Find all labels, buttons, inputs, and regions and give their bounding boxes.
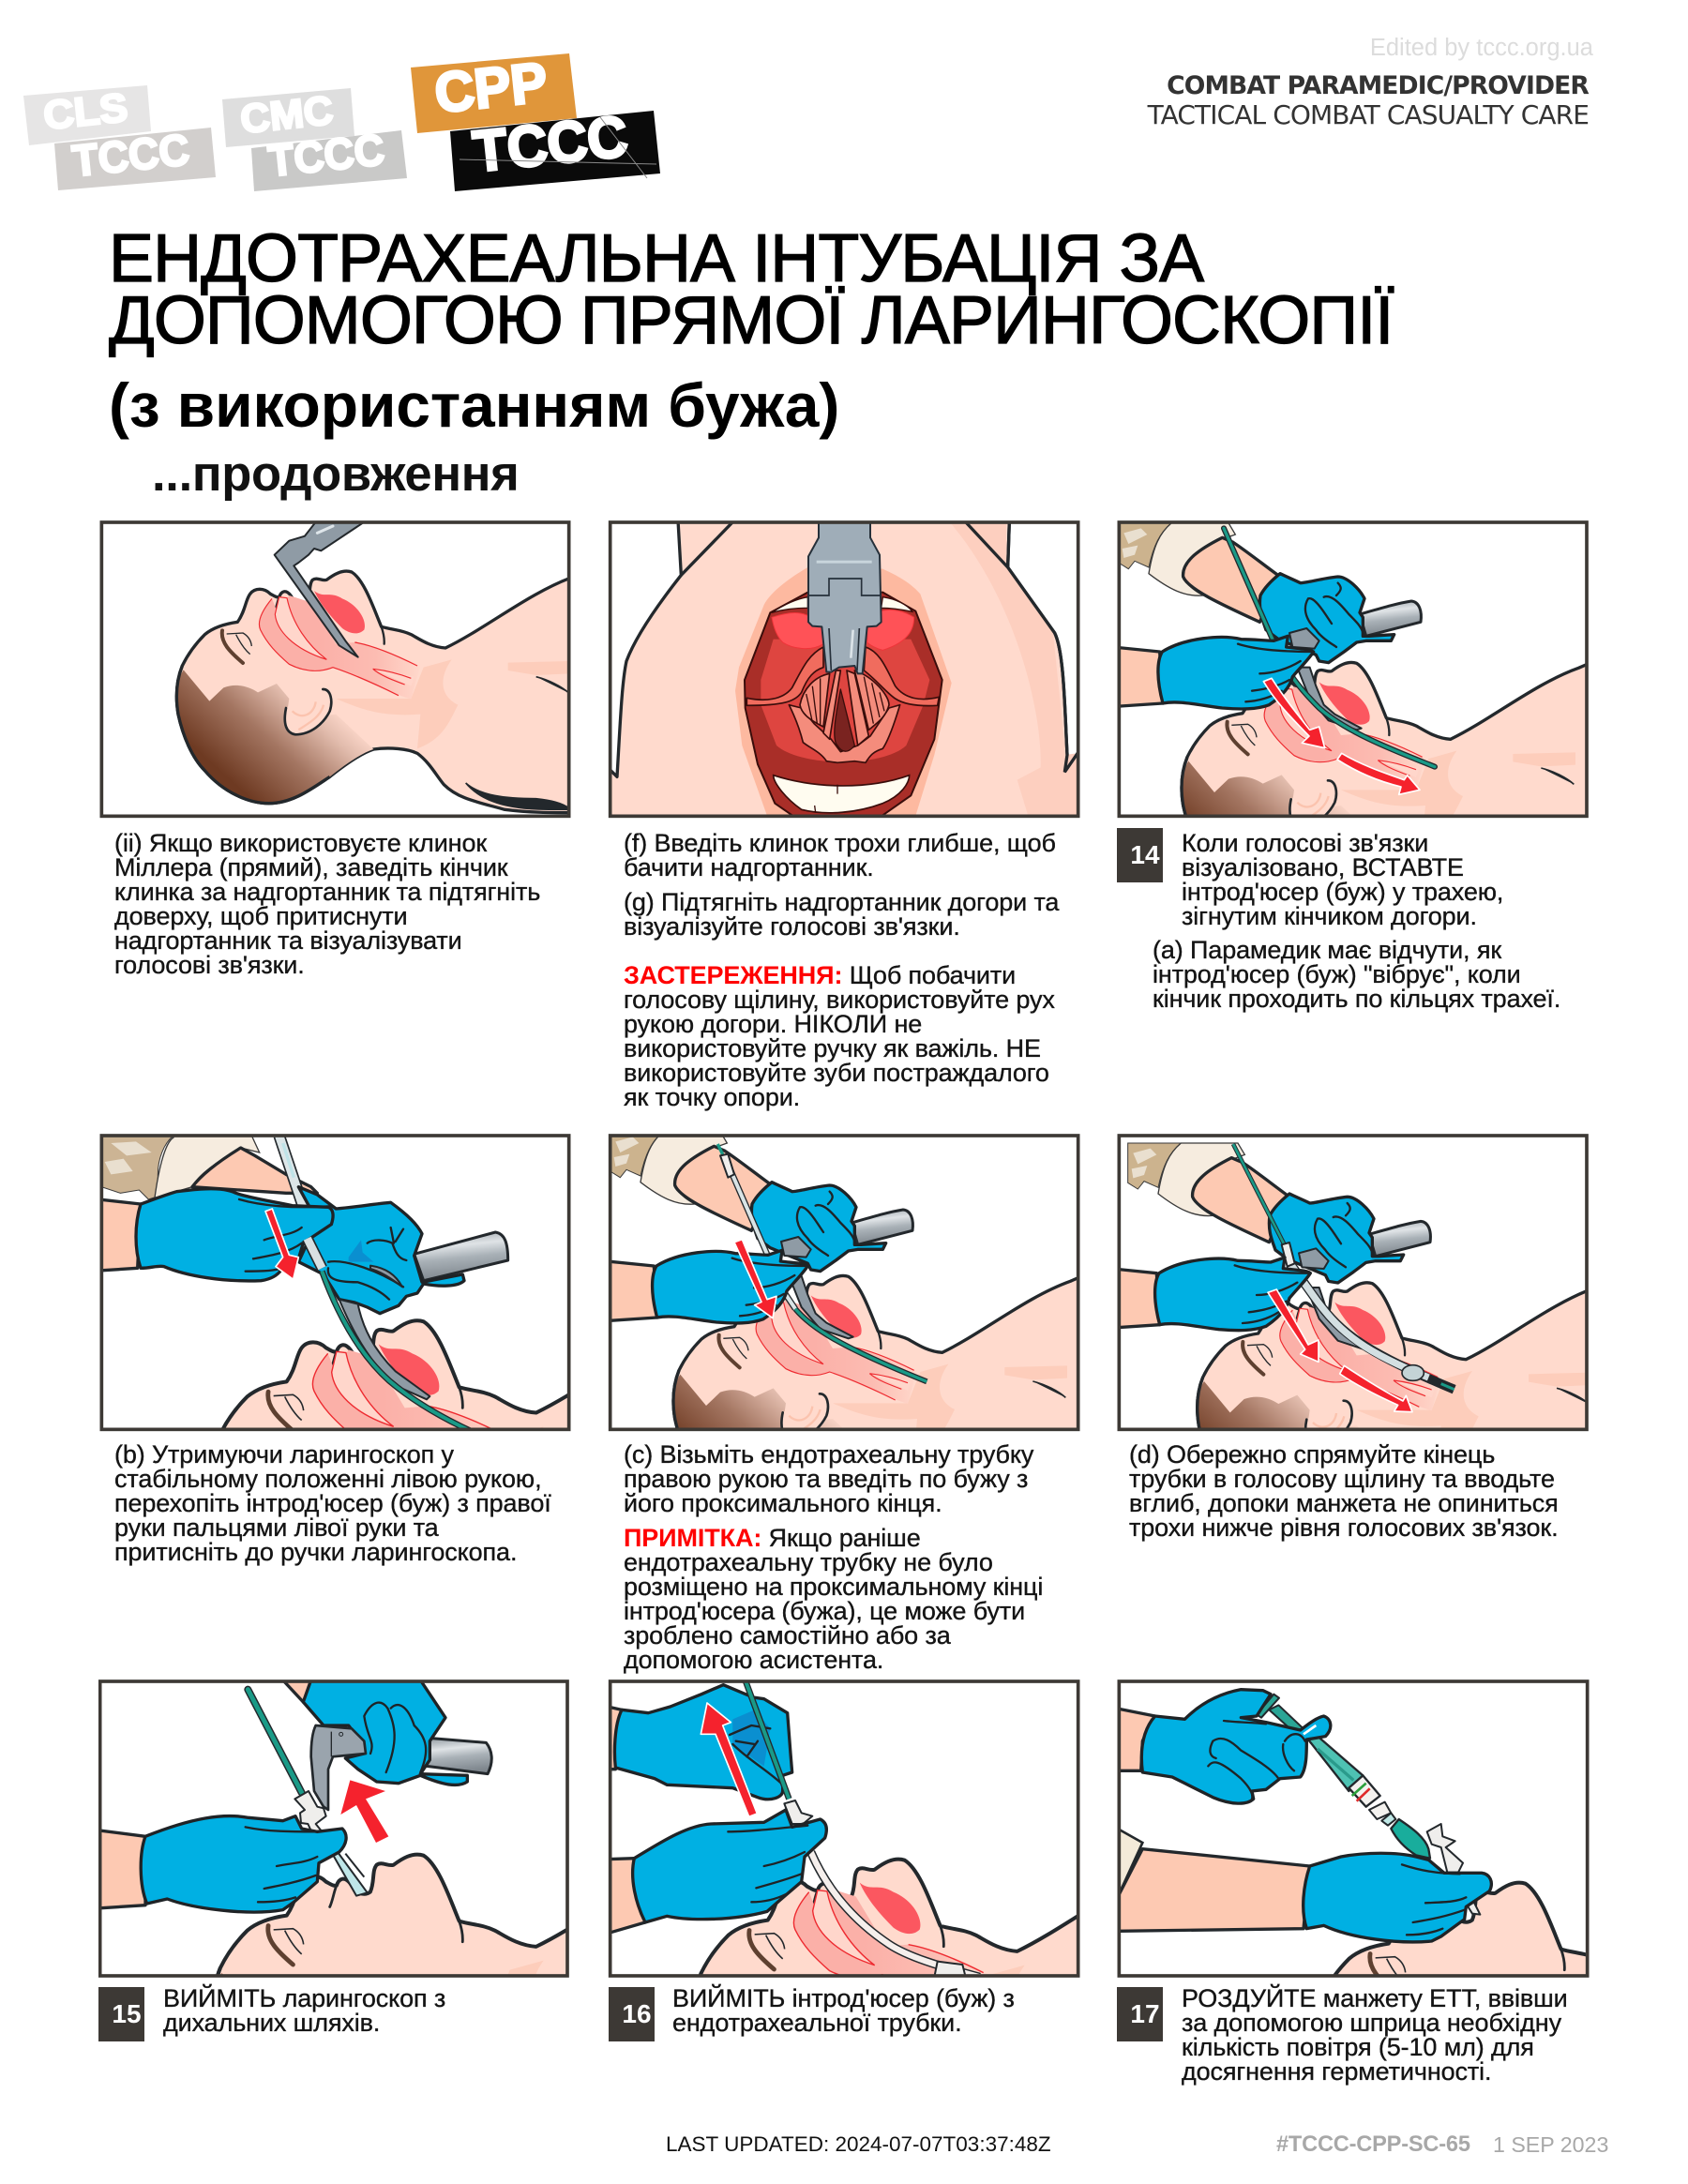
title: ДОПОМОГОЮ ПРЯМОЇ ЛАРИНГОСКОПІЇ — [109, 283, 1393, 358]
lower hand — [136, 1189, 333, 1281]
lower hand — [1107, 636, 1314, 709]
badge: CPP TCCC: TCCC — [470, 104, 631, 185]
upper hand — [303, 1680, 467, 1785]
text: step 16 — [672, 1984, 1015, 2037]
text: step c and note: зроблено самостійно або за — [624, 1621, 951, 1649]
syringe — [1257, 1694, 1463, 1873]
text: Miller blade instruction: Міллера (прямий), заведіть кінчик — [114, 853, 507, 881]
panel: holding bougie close-up — [99, 1134, 570, 1431]
badge: CLS — [23, 85, 151, 145]
illustration — [1104, 1143, 1638, 1526]
step 15 number: 15 — [112, 1999, 142, 2028]
text: step c and note: ендотрахеальну трубку не було — [624, 1548, 993, 1576]
text: step 15: ВИЙМІТЬ ларингоскоп з — [163, 1984, 445, 2012]
header: course name — [1148, 71, 1589, 130]
patient head — [673, 1262, 1114, 1519]
badge: CPP — [411, 51, 577, 133]
text: step 17: кількість повітря (5-10 мл) для — [1182, 2033, 1534, 2061]
syringe tip over hand — [1304, 1725, 1316, 1734]
text: step b: руки пальцями лівої руки та — [114, 1514, 439, 1542]
text: step c and note: (c) Візьміть ендотрахеальну трубку — [624, 1440, 1033, 1469]
mouth interior — [745, 593, 942, 818]
text: step c and note: допомогою асистента. — [624, 1646, 883, 1674]
step 16 number — [609, 1987, 655, 2041]
text: step 14 — [1182, 829, 1503, 930]
step 16 number: 16 — [622, 1999, 652, 2028]
panel: threading tube — [608, 1134, 1080, 1431]
tube connector and tube — [294, 1791, 368, 1896]
text: step c and note: розміщено на проксимальному кінці — [624, 1573, 1043, 1601]
text: step 15 — [163, 1984, 445, 2037]
text: step 14: Коли голосові зв'язки — [1182, 829, 1428, 857]
text: step b: (b) Утримуючи ларингоскоп у — [114, 1440, 454, 1469]
laryngoscope blade — [275, 522, 364, 657]
badge: CLS TCCC: TCCC — [70, 124, 191, 186]
text: Miller blade instruction: клинка за надгортанник та підтягніть — [114, 878, 540, 906]
illustration — [1116, 1690, 1688, 2175]
illustration — [1121, 523, 1585, 814]
header: course name: TACTICAL COMBAT CASUALTY CARE — [1148, 99, 1589, 130]
upper teeth — [772, 597, 912, 612]
text: step b: притисніть до ручки ларингоскопа. — [114, 1538, 517, 1566]
red arrow — [734, 1240, 776, 1318]
text: epiglottis steps and caution: голосову щілину, використовуйте рух — [624, 986, 1055, 1014]
step 17 number — [1117, 1987, 1163, 2041]
text: step 14: візуалізовано, ВСТАВТЕ — [1182, 853, 1464, 881]
badge: CMC TCCC: TCCC — [266, 124, 386, 186]
title: ЕНДОТРАХЕАЛЬНА ІНТУБАЦІЯ ЗА — [109, 221, 1203, 296]
badge: CMC — [222, 88, 354, 147]
lower hand — [1304, 1853, 1491, 1942]
text: step 16: ендотрахеальної трубки. — [672, 2009, 961, 2037]
text: Miller blade instruction — [114, 829, 540, 979]
blade and bougie — [1224, 528, 1435, 767]
lips — [735, 567, 952, 816]
panel: remove bougie — [608, 1679, 1080, 1978]
bougie — [746, 1680, 789, 1799]
text: step 17: досягнення герметичності. — [1182, 2057, 1491, 2086]
text: epiglottis steps and caution: рукою догори. НІКОЛИ не — [624, 1010, 922, 1038]
text: step d — [1129, 1440, 1559, 1542]
text: epiglottis steps and caution: використовуйте зуби постраждалого — [624, 1059, 1049, 1087]
text: step d: трубки в голосову щілину та вводьте — [1129, 1465, 1555, 1493]
red arrow — [265, 1209, 298, 1279]
text: epiglottis steps and caution: використовуйте ручку як важіль. НЕ — [624, 1034, 1041, 1062]
badge: CPP: CPP — [431, 51, 550, 125]
text: epiglottis steps and caution: як точку опори. — [624, 1083, 800, 1111]
upper hand with laryngoscope — [1119, 523, 1421, 663]
logos: CLS, CMC, CPP TCCC badges — [23, 51, 660, 191]
text: step 16: ВИЙМІТЬ інтрод'юсер (буж) з — [672, 1984, 1015, 2012]
text: epiglottis steps and caution: візуалізуйте голосові зв'язки. ЗАСТЕРЕЖЕННЯ: Щоб побачити — [624, 912, 1016, 989]
patient head — [695, 1844, 1224, 2151]
text: step c and note — [624, 1440, 1043, 1674]
step 15 number — [98, 1987, 144, 2041]
text: step d: трохи нижче рівня голосових зв'язок. — [1129, 1514, 1559, 1542]
text: step 17 — [1182, 1984, 1568, 2086]
text: step 15: дихальних шляхів. — [163, 2009, 380, 2037]
panel: glottis front view — [608, 520, 1080, 818]
text: step 17: за допомогою шприца необхідну — [1182, 2009, 1561, 2037]
step 17 number: 17 — [1130, 1999, 1160, 2028]
lower hand — [608, 1810, 826, 1934]
patient head — [174, 569, 567, 814]
illustration — [610, 520, 1081, 821]
text: Miller blade instruction: доверху, щоб притиснути — [114, 902, 407, 930]
laryngoscope blade front — [808, 522, 882, 673]
text: step d: (d) Обережно спрямуйте кінець — [1129, 1440, 1495, 1469]
text: epiglottis steps and caution: бачити надгортанник. (g) Підтягніть надгортанник догори та — [624, 853, 1059, 916]
text: Miller blade instruction: надгортанник та візуалізувати — [114, 926, 462, 955]
upper hand with laryngoscope — [610, 1132, 912, 1338]
upper hand — [608, 1685, 792, 1800]
laryngoscope — [311, 1725, 366, 1810]
text: Miller blade instruction: голосові зв'язки. — [114, 951, 305, 979]
tube connector — [784, 1800, 812, 1824]
lower hand — [601, 1250, 807, 1323]
red arrows — [1263, 678, 1420, 794]
red arrow up — [701, 1703, 757, 1816]
bougie — [322, 1272, 476, 1434]
text: epiglottis steps and caution: (f) Введіть клинок трохи глибше, щоб — [624, 829, 1056, 857]
step 14 number: 14 — [1130, 840, 1160, 869]
illustration — [601, 1132, 1114, 1519]
lower teeth — [774, 776, 910, 813]
illustration — [97, 1680, 743, 2146]
continuation label: ...продовження — [152, 446, 519, 502]
footer: last updated: LAST UPDATED: 2024-07-07T03:37:48Z — [666, 2132, 1051, 2156]
upper hand with laryngoscope — [1128, 1143, 1430, 1350]
panel: inserting bougie — [1118, 520, 1589, 818]
text: step d: вглиб, допоки манжета не опиниться — [1129, 1489, 1559, 1517]
tonsils — [772, 610, 914, 650]
red arrow up — [340, 1780, 388, 1843]
panel: Miller blade side view — [99, 520, 570, 818]
lower arm and sleeve — [1118, 1829, 1310, 1931]
text: Miller blade instruction: (ii) Якщо використовуєте клинок — [114, 829, 487, 857]
panel: advancing tube — [1118, 1134, 1589, 1431]
tube — [811, 1852, 980, 1977]
text: step 14 note a: інтрод'юсер (буж) "вібрує", коли — [1153, 960, 1521, 988]
introducer upper — [279, 1136, 303, 1207]
red arrows — [1268, 1289, 1412, 1412]
tube connector — [308, 1239, 322, 1268]
text: step 14 note a: кінчик проходить по кільцях трахеї. — [1153, 985, 1560, 1013]
sleeve and arms — [98, 1136, 317, 1271]
header: course name: COMBAT PARAMEDIC/PROVIDER — [1167, 71, 1589, 100]
text: step b: перехопіть інтрод'юсер (буж) з правої — [114, 1489, 551, 1517]
text: step c and note: його проксимального кінця. ПРИМІТКА: Якщо раніше — [624, 1489, 942, 1552]
holding hand — [298, 1187, 464, 1314]
upper hand — [1116, 1690, 1331, 1803]
edited by note: Edited by tccc.org.ua — [1370, 35, 1593, 61]
badge: CLS: CLS — [41, 85, 130, 139]
patient head — [1180, 660, 1585, 814]
bougie and tube — [717, 1144, 927, 1381]
blade — [339, 1300, 430, 1399]
forearm and handle — [283, 1680, 491, 1774]
patient head — [221, 1318, 567, 1427]
tube — [1233, 1144, 1454, 1390]
footer: card code: #TCCC-CPP-SC-65 — [1276, 2132, 1470, 2157]
text: step b: стабільному положенні лівою рукою, — [114, 1465, 541, 1493]
step 14 number — [1117, 828, 1163, 882]
text: step 14: зігнутим кінчиком догори. — [1182, 902, 1477, 930]
patient head — [1316, 1867, 1688, 2175]
text: step 17: РОЗДУЙТЕ манжету ETT, ввівши — [1182, 1984, 1568, 2012]
patient head — [214, 1839, 743, 2146]
text: epiglottis steps and caution — [623, 829, 1060, 1111]
text: step c and note: інтрод'юсера (бужа), це може бути — [624, 1597, 1025, 1625]
illustration — [174, 523, 567, 814]
illustration — [103, 1137, 567, 1427]
lower hand — [1104, 1258, 1310, 1331]
vocal cords — [746, 647, 939, 762]
footer: date: 1 SEP 2023 — [1493, 2132, 1608, 2157]
panel: inflate cuff — [1118, 1679, 1589, 1978]
text: step b — [114, 1440, 551, 1566]
face and neck — [610, 520, 1081, 821]
text: step 14 note a: (a) Парамедик має відчути, як — [1153, 936, 1501, 964]
illustration — [608, 1680, 1224, 2151]
laryngoscope handle — [414, 1232, 508, 1281]
title — [109, 221, 1394, 358]
text: step 14 note a — [1153, 936, 1560, 1013]
badge: CMC: CMC — [238, 88, 336, 143]
text: step c and note: правою рукою та введіть по бужу з — [624, 1465, 1028, 1493]
subtitle: (з використанням бужа) — [109, 370, 839, 440]
text: step 14: інтрод'юсер (буж) у трахею, — [1182, 878, 1503, 906]
bougie — [248, 1690, 302, 1793]
lower hand — [97, 1816, 346, 1912]
panel: remove laryngoscope — [98, 1679, 569, 1978]
patient head — [1198, 1270, 1638, 1526]
